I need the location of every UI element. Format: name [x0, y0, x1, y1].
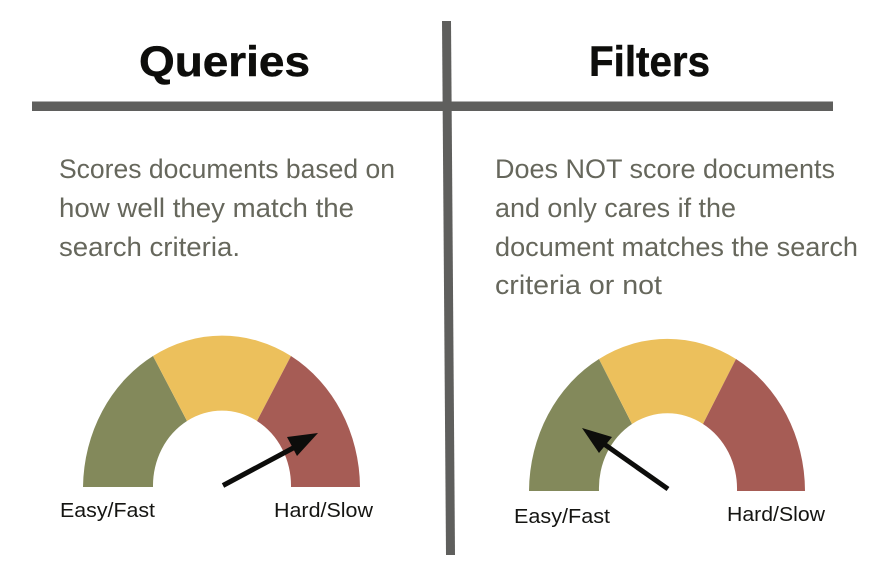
text block: queries description: how well they match the	[59, 193, 354, 223]
gauge segment: easy	[529, 359, 632, 491]
heading: Filters: Filters	[589, 38, 710, 86]
text block: filters description: and only cares if the	[495, 193, 736, 223]
text block: queries description: search criteria.	[59, 232, 240, 262]
text block: queries description: Scores documents based on	[59, 154, 395, 184]
gauge segment: hard	[257, 356, 360, 487]
text block: filters description: document matches the search	[495, 232, 858, 262]
text block: filters description: Does NOT score documents	[495, 154, 835, 184]
panel: filters	[495, 38, 858, 528]
arrow: pointing to hard	[223, 433, 318, 486]
gauge segment: medium	[599, 339, 736, 424]
text block: filters description	[495, 154, 858, 300]
chart: filters gauge	[529, 339, 805, 491]
vertical divider	[442, 21, 455, 555]
gauge segment: easy	[83, 356, 187, 487]
label: easy/fast: Easy/Fast	[60, 500, 155, 522]
label: easy/fast: Easy/Fast	[514, 506, 610, 528]
panel: queries	[59, 38, 395, 522]
chart: queries gauge	[83, 336, 360, 487]
gauge segment: medium	[153, 336, 291, 421]
text block: filters description: criteria or not	[495, 270, 663, 300]
arrow: pointing to easy	[582, 428, 668, 489]
heading: Queries: Queries	[139, 38, 310, 86]
label: hard/slow: Hard/Slow	[727, 504, 826, 526]
gauge segment: hard	[703, 359, 805, 491]
horizontal divider	[32, 102, 833, 111]
text block: queries description	[59, 154, 395, 262]
label: hard/slow: Hard/Slow	[274, 500, 374, 522]
